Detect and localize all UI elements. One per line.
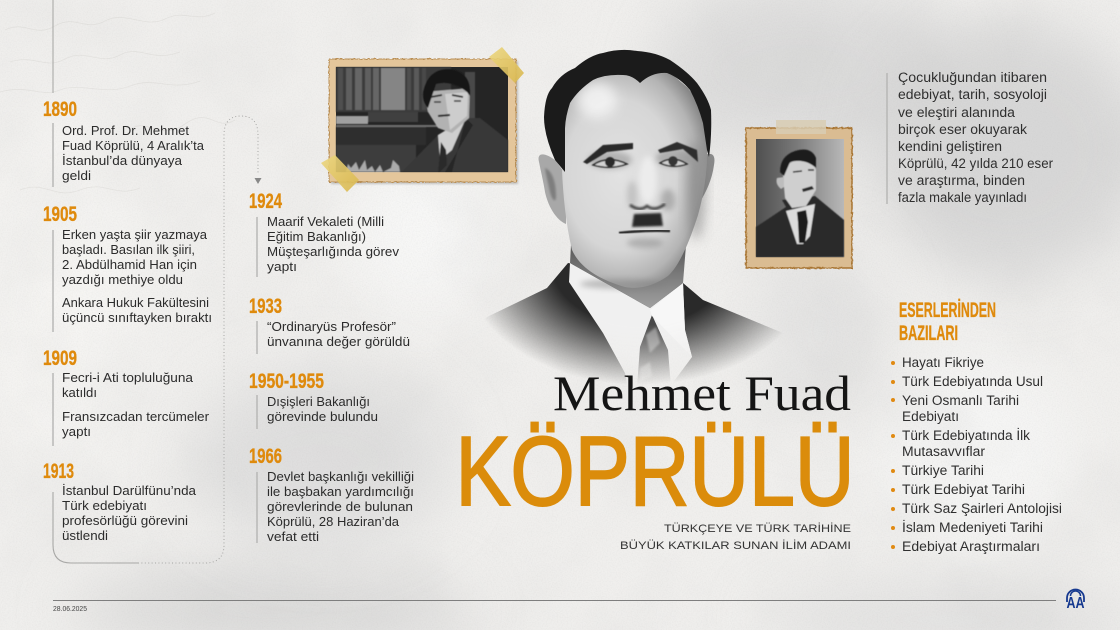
heading: BAZILARI: [899, 322, 958, 345]
event 1924: [249, 190, 400, 277]
photo: young portrait with tape: [746, 120, 852, 268]
subtitle: BÜYÜK KATKILAR SUNAN İLİM ADAMI: [620, 539, 851, 552]
event 1909: katıldı: [62, 385, 97, 400]
ears: [539, 154, 715, 224]
face: [562, 70, 707, 288]
event 1933: 1933: [249, 295, 282, 318]
list items: Türk Edebiyatında İlk: [902, 428, 1030, 443]
list items: Türk Edebiyatında Usul: [902, 374, 1043, 389]
event 1966: Devlet başkanlığı vekilliği: [267, 469, 414, 484]
biography text block: kendini geliştiren: [898, 139, 1002, 154]
event 1890: Fuad Köprülü, 4 Aralık’ta: [62, 138, 205, 153]
biography text block: edebiyat, tarih, sosyoloji: [898, 87, 1047, 102]
event 1890: İstanbul’da dünyaya: [62, 153, 183, 168]
surname: KÖPRÜLÜ: KÖPRÜLÜ: [456, 416, 854, 526]
eyes: [593, 156, 687, 167]
date: 28.06.2025: [53, 604, 87, 613]
list items: İslam Medeniyeti Tarihi: [902, 520, 1043, 535]
event 1966: [249, 445, 414, 544]
event 1933: [249, 295, 410, 354]
list items: Türk Edebiyat Tarihi: [902, 482, 1025, 497]
event 1913: [43, 460, 197, 543]
event 1905: Ankara Hukuk Fakültesini: [62, 295, 209, 310]
icon: AA logo: AA: [1066, 595, 1085, 612]
bullets: [891, 361, 895, 549]
list items: Yeni Osmanlı Tarihi: [902, 393, 1019, 408]
timeline connector: [53, 0, 262, 563]
event 1905: üçüncü sınıftayken bıraktı: [62, 310, 212, 325]
timeline column 2: [249, 190, 414, 544]
suit: [402, 118, 508, 172]
list items: Türk Saz Şairleri Antolojisi: [902, 501, 1062, 516]
event 1950-1955: [249, 370, 378, 429]
event 1905: 1905: [43, 203, 77, 226]
event 1966: ile başbakan yardımcılığı: [267, 484, 414, 499]
list items: Edebiyat Araştırmaları: [902, 539, 1040, 554]
event 1905: yazdığı methiye oldu: [62, 272, 183, 287]
subtitle: [620, 522, 851, 552]
hair: [544, 50, 711, 172]
moustache: [632, 213, 663, 227]
event 1905: 2. Abdülhamid Han için: [62, 257, 197, 272]
event 1950-1955: görevinde bulundu: [267, 409, 378, 424]
list items: Mutasavvıflar: [902, 444, 986, 459]
footer: [53, 590, 1085, 613]
event 1924: Müşteşarlığında görev: [267, 244, 400, 259]
face: [424, 88, 470, 133]
event 1905: başladı. Basılan ilk şiiri,: [62, 242, 195, 257]
list items: Türkiye Tarihi: [902, 463, 984, 478]
biography text block: birçok eser okuyarak: [898, 122, 1027, 137]
works list: [891, 299, 1062, 554]
eyebrows: [583, 142, 698, 164]
event 1966: 1966: [249, 445, 282, 468]
event 1909: Fransızcadan tercümeler: [62, 409, 210, 424]
event 1966: Köprülü, 28 Haziran’da: [267, 514, 400, 529]
event 1909: Fecri-i Ati topluluğuna: [62, 370, 194, 385]
biography text block: fazla makale yayınladı: [898, 190, 1027, 205]
heading: ESERLERİNDEN: [899, 299, 996, 322]
event 1890: geldi: [62, 168, 91, 183]
event 1913: 1913: [43, 460, 74, 483]
event 1909: [43, 347, 210, 446]
biography text block: [887, 70, 1053, 205]
event 1924: Eğitim Bakanlığı): [267, 229, 366, 244]
heading: [899, 299, 996, 345]
event 1913: üstlendi: [62, 528, 108, 543]
list items: [902, 355, 1062, 554]
event 1905: [43, 203, 212, 332]
name: Mehmet Fuad: Mehmet Fuad: [553, 365, 851, 421]
icon: AA logo: [1066, 590, 1085, 612]
event 1950-1955: 1950-1955: [249, 370, 324, 393]
event 1966: görevlerinde de bulunan: [267, 499, 413, 514]
event 1890: Ord. Prof. Dr. Mehmet: [62, 123, 189, 138]
event 1890: 1890: [43, 98, 77, 121]
biography text block: Köprülü, 42 yılda 210 eser: [898, 156, 1053, 171]
event 1913: Türk edebiyatı: [62, 498, 147, 513]
biography text block: Çocukluğundan itibaren: [898, 70, 1047, 85]
event 1924: yaptı: [267, 259, 297, 274]
list items: Hayatı Fikriye: [902, 355, 984, 370]
event 1909: yaptı: [62, 424, 91, 439]
title: [456, 365, 854, 552]
event 1924: Maarif Vekaleti (Milli: [267, 214, 384, 229]
event 1913: İstanbul Darülfünu’nda: [62, 483, 197, 498]
photo: at the desk with bookshelves: [321, 47, 524, 192]
event 1890: [43, 98, 205, 187]
event 1909: 1909: [43, 347, 77, 370]
body: suit, collar and tie: [487, 263, 780, 382]
event 1905: Erken yaşta şiir yazmaya: [62, 227, 208, 242]
mouth: [619, 231, 670, 233]
list items: Edebiyatı: [902, 409, 959, 424]
event 1933: ünvanına değer görüldü: [267, 334, 410, 349]
neck: [570, 245, 686, 308]
biography text block: ve araştırma, binden: [898, 173, 1025, 188]
event 1966: vefat etti: [267, 529, 319, 544]
main portrait: [487, 50, 780, 382]
biography text block: ve eleştiri alanında: [898, 105, 1016, 120]
event 1950-1955: Dışişleri Bakanlığı: [267, 394, 370, 409]
nose: [630, 204, 665, 209]
subtitle: TÜRKÇEYE VE TÜRK TARİHİNE: [664, 522, 851, 535]
event 1933: “Ordinaryüs Profesör”: [267, 319, 396, 334]
footer rule: [53, 600, 1056, 601]
timeline column 1: [43, 98, 212, 543]
face shading: [577, 82, 705, 289]
event 1924: 1924: [249, 190, 282, 213]
event 1913: profesörlüğü görevini: [62, 513, 188, 528]
